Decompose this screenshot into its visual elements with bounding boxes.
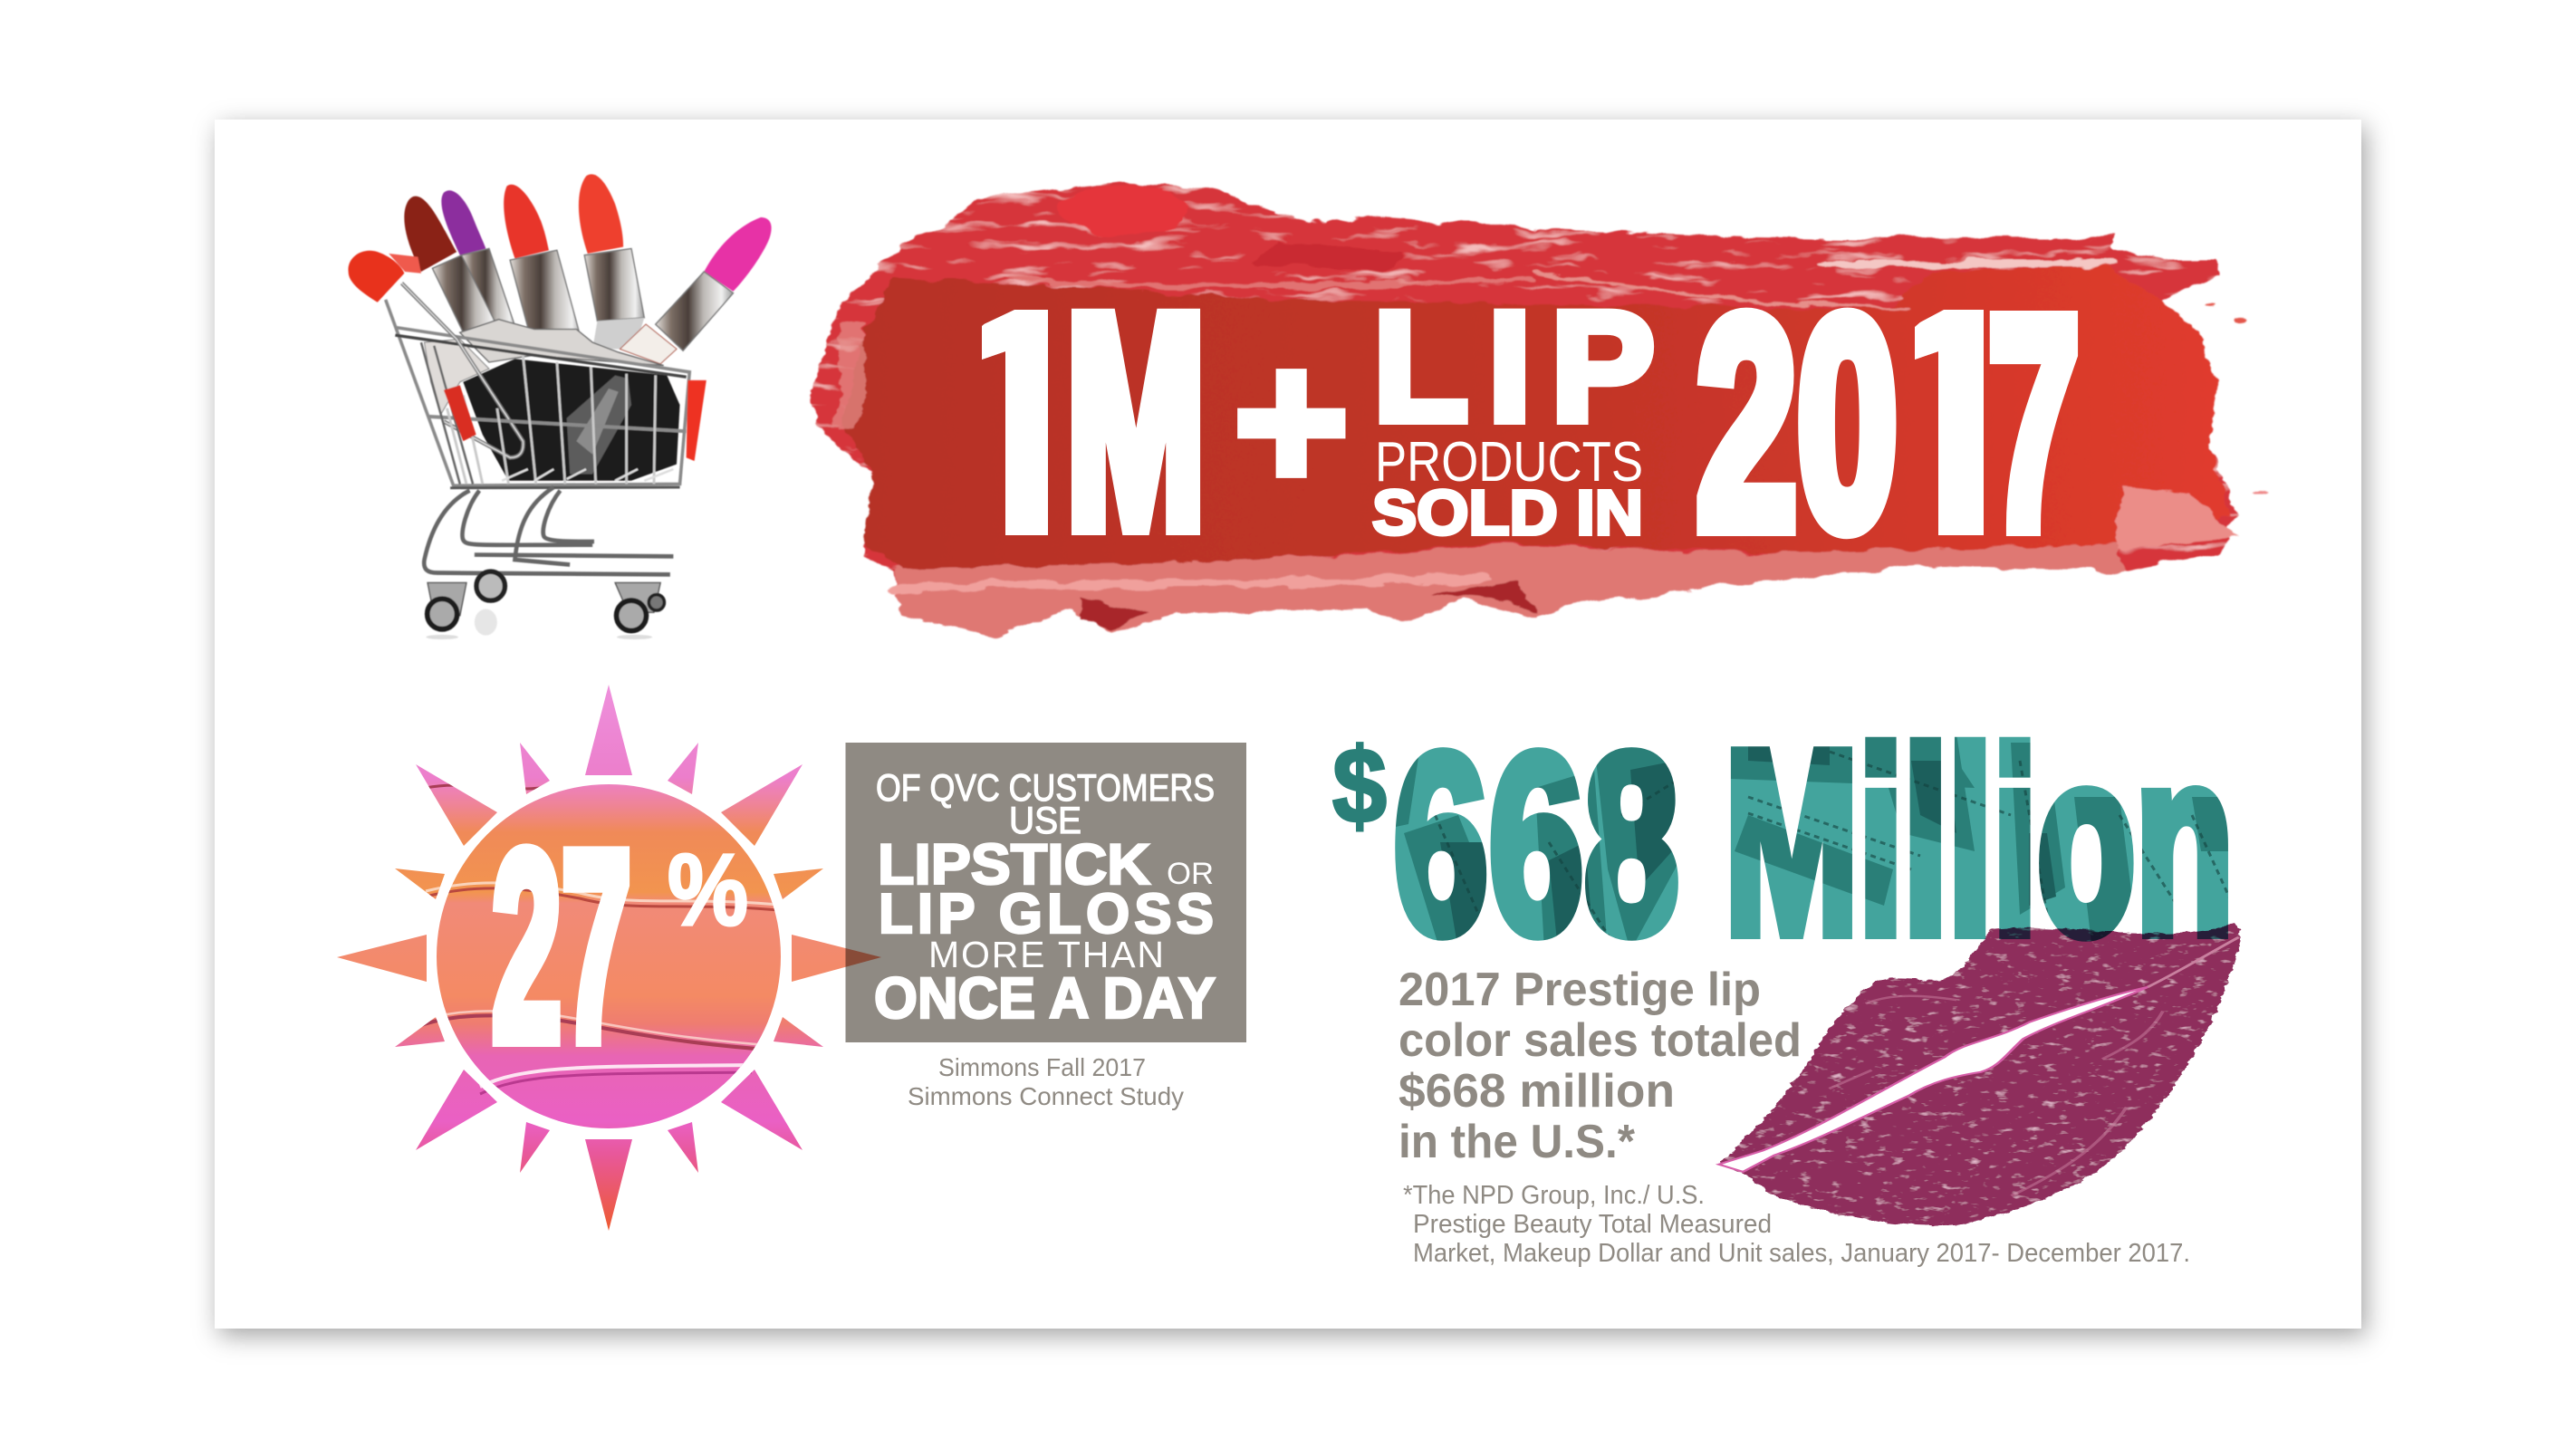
headline: 2017: 7 — [1988, 255, 2080, 590]
headline: PRODUCTS: PRODUCTS — [1375, 431, 1643, 494]
headline: LIP: LIP — [1373, 280, 1655, 454]
cart wire basket — [386, 283, 689, 488]
lip crease lines — [1830, 937, 2239, 1195]
text: lipstick or: OR — [1167, 857, 1214, 891]
source note: Simmons — [908, 1053, 1184, 1110]
panel: 27 percent sun: 27 — [492, 796, 631, 1096]
lips illustration — [1719, 925, 2242, 1225]
lipstick: pink — [620, 217, 772, 364]
cart red handle and tags — [349, 251, 706, 461]
text: 2017 prestige sales: 2017 Prestige lip — [1399, 964, 1761, 1016]
lipstick: purple — [441, 190, 518, 336]
shopping cart with lipsticks — [349, 174, 772, 639]
lipstick: dark red — [404, 197, 502, 339]
silver lipstick collars at cart rim — [425, 320, 664, 415]
footnote: NPD source — [1403, 1181, 2190, 1268]
source note: Simmons: Simmons Fall 2017 — [938, 1053, 1146, 1081]
dollar sign: $ — [1332, 726, 1387, 846]
panel: 27 percent sun — [326, 679, 888, 1241]
word Million: Million — [1725, 697, 2234, 987]
white card panel — [215, 120, 2361, 1329]
headline: 2017: 1 — [1893, 255, 2018, 590]
footnote: NPD source: Prestige Beauty Total Measured — [1413, 1210, 1772, 1239]
source note: Simmons: Simmons Connect Study — [908, 1082, 1184, 1110]
panel: grey QVC customers box — [846, 743, 1246, 1042]
text: lipstick or: LIPSTICK — [878, 833, 1150, 897]
text: of QVC customers use: OF QVC CUSTOMERS — [876, 766, 1215, 809]
text: 2017 prestige sales: in the U.S.* — [1399, 1116, 1636, 1168]
footnote: NPD source: *The NPD Group, Inc./ U.S. — [1403, 1181, 1705, 1210]
text: once a day: ONCE A DAY — [874, 965, 1216, 1031]
headline: 2017: 20 — [1697, 255, 1898, 590]
big number 668: 668 — [1393, 701, 1679, 986]
headline: 1M: 1 — [960, 257, 1083, 587]
text: of QVC customers use: USE — [1009, 799, 1081, 841]
text: 2017 prestige sales: $668 million — [1399, 1065, 1675, 1118]
cart wheels — [426, 571, 664, 639]
black lipstick bodies in basket — [463, 359, 680, 481]
panel: 668 million headline — [1332, 697, 2234, 987]
headline: SOLD IN: SOLD IN — [1372, 477, 1643, 548]
text: 2017 prestige sales — [1399, 964, 1802, 1168]
sun burst icon — [326, 679, 888, 1241]
text: lip gloss: LIP GLOSS — [879, 883, 1214, 945]
text: of QVC customers use — [876, 766, 1215, 841]
mouth opening — [1719, 987, 2148, 1172]
headline: 2017 — [1697, 308, 2078, 540]
infographic artwork — [337, 174, 2269, 1267]
headline: plus: + — [1234, 312, 1349, 532]
lipstick: orange red — [579, 174, 644, 349]
text: more than: MORE THAN — [928, 934, 1164, 975]
footnote: NPD source: Market, Makeup Dollar and Unit sales, January 2017- December 2017. — [1413, 1239, 2190, 1268]
lipstick: red — [504, 185, 582, 346]
headline: 1M — [982, 308, 1201, 535]
swatch artwork — [812, 182, 2268, 637]
panel: lipstick brush swatch with headline — [812, 182, 2268, 637]
percent sign: % — [668, 833, 748, 946]
lips shape — [1719, 925, 2242, 1225]
headline: 1M: M — [1067, 257, 1205, 587]
text: 2017 prestige sales: color sales totaled — [1399, 1014, 1802, 1067]
cart chassis and legs — [424, 487, 673, 574]
grey box background — [846, 743, 1246, 1042]
